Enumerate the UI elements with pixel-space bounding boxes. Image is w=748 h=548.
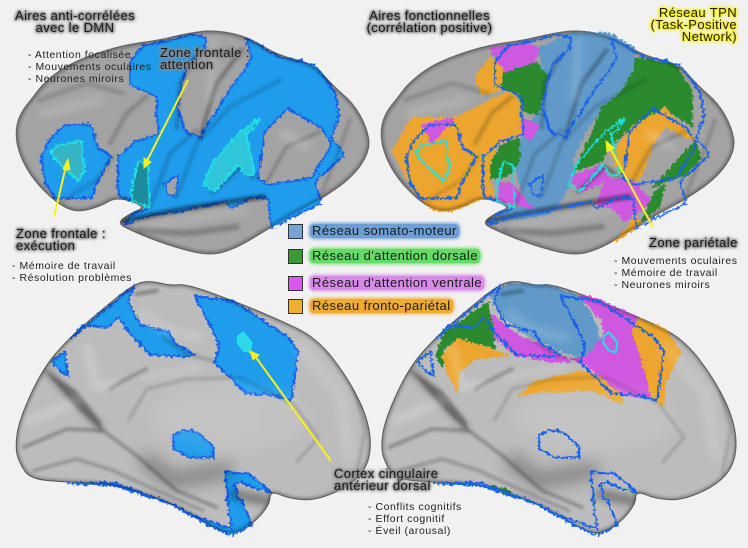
network colour fills	[391, 32, 699, 240]
heading: functional areas: (corrélation positive)	[367, 20, 492, 35]
list: parietal functions: - Mémoire de travail	[614, 267, 718, 279]
list: cingulate functions: - Effort cognitif	[368, 513, 445, 525]
list: cingulate functions: - Éveil (arousal)	[368, 525, 451, 537]
list: execution functions: - Résolution problèmes	[12, 272, 132, 284]
heading: anti-correlated areas: avec le DMN	[36, 20, 114, 35]
list: parietal functions	[614, 255, 738, 291]
list: attention functions: - Neurones miroirs	[28, 73, 124, 85]
label: parietal zone: Zone pariétale	[649, 235, 738, 250]
blue medial outlines	[416, 284, 662, 534]
heading: functional areas	[364, 8, 494, 37]
cyan core outlines	[415, 117, 623, 207]
label: dorsal anterior cingulate cortex: antérieur dorsal	[334, 478, 431, 493]
legend label: ventral attention: Réseau d'attention ventrale	[312, 275, 482, 290]
heading: functional areas: Aires fonctionnelles	[369, 8, 490, 23]
blue network outlines	[405, 33, 708, 227]
medial network colour fills	[434, 282, 679, 494]
list: attention functions: - Mouvements oculaires	[28, 61, 152, 73]
heading: TPN network: Réseau TPN	[659, 5, 737, 20]
list: parietal functions: - Mouvements oculaires	[614, 255, 738, 267]
cyan core regions	[50, 117, 258, 207]
brain: lateral view, functional networks	[381, 31, 734, 254]
brain: medial view, functional networks	[382, 282, 736, 534]
label: frontal attention zone: attention	[160, 57, 213, 72]
label: frontal attention zone: Zone frontale :	[160, 45, 250, 60]
label: dorsal anterior cingulate cortex	[332, 466, 440, 494]
heading: TPN network: (Task-Positive	[650, 17, 737, 32]
legend swatch: ventral attention	[288, 276, 303, 291]
brain: lateral view, anti-correlated areas	[16, 31, 369, 254]
heading: TPN network: Network)	[682, 29, 737, 44]
list: parietal functions: - Neurones miroirs	[614, 279, 710, 291]
heading: TPN network	[648, 4, 740, 46]
arrow: frontal execution zone	[54, 159, 70, 217]
legend	[288, 220, 487, 316]
label: dorsal anterior cingulate cortex: Cortex cingulaire	[334, 466, 438, 481]
legend label: fronto-parietal: Réseau fronto-pariétal	[312, 298, 451, 313]
blue medial regions	[50, 284, 297, 534]
list: cingulate functions	[368, 501, 462, 537]
blue anti-correlated regions	[40, 33, 343, 227]
list: execution functions	[12, 260, 132, 284]
list: cingulate functions: - Conflits cognitifs	[368, 501, 462, 513]
cyan medial core	[237, 332, 252, 352]
heading: anti-correlated areas: Aires anti-corrélées	[15, 8, 135, 23]
legend swatch: somato-motor	[288, 224, 303, 239]
legend swatch: fronto-parietal	[288, 299, 303, 314]
list: attention functions	[28, 49, 152, 85]
list: execution functions: - Mémoire de travail	[12, 260, 116, 272]
label: frontal execution zone	[14, 226, 107, 253]
legend label: somato-motor: Réseau somato-moteur	[312, 223, 457, 238]
brain: medial view, anti-correlated areas	[16, 282, 370, 534]
legend label: dorsal attention: Réseau d'attention dorsale	[312, 248, 478, 263]
arrow: frontal attention zone	[144, 80, 188, 168]
arrow: parietal zone	[606, 141, 653, 227]
list: attention functions: - Attention focalisée	[28, 49, 131, 61]
label: frontal execution zone: Zone frontale :	[16, 226, 106, 241]
legend swatch: dorsal attention	[288, 249, 303, 264]
cyan medial outline	[603, 332, 617, 352]
arrow: dorsal anterior cingulate	[250, 351, 331, 461]
label: frontal execution zone: exécution	[16, 238, 75, 253]
heading: anti-correlated areas	[12, 8, 370, 514]
label: frontal attention zone	[158, 44, 250, 72]
